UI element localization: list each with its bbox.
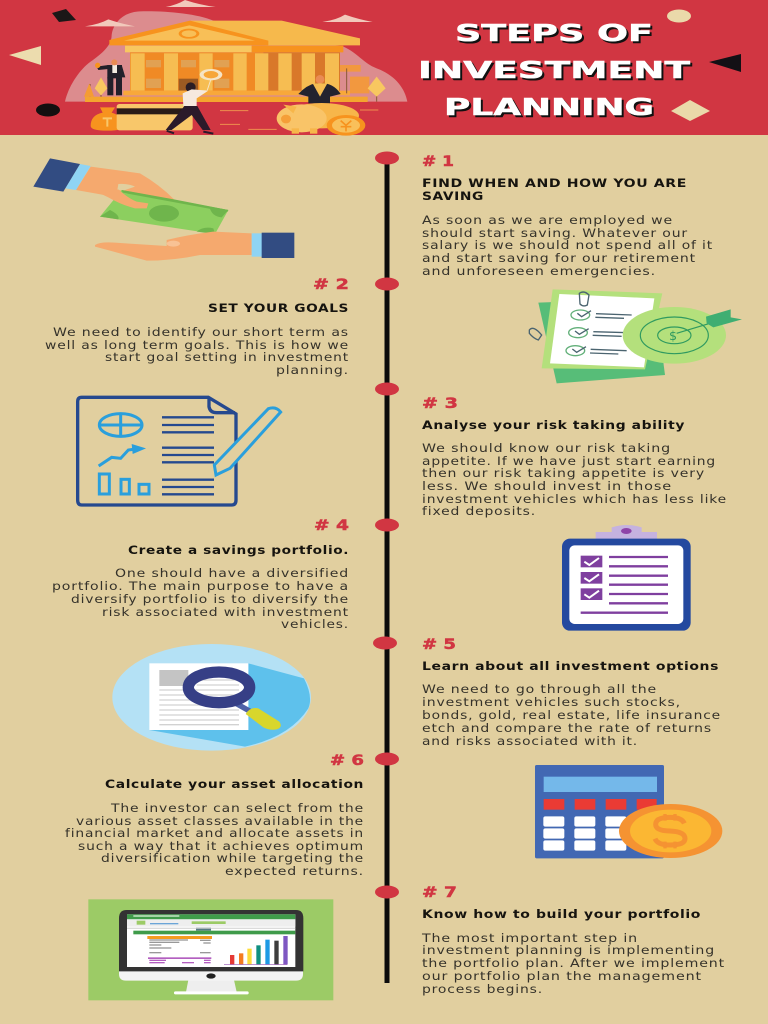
step 6 text: Calculate your asset allocation xyxy=(105,777,364,791)
step 3 text: fixed deposits. xyxy=(422,504,536,518)
icon: document with pen xyxy=(78,397,281,505)
step 7 text: investment planning is implementing xyxy=(422,943,715,957)
step 1 text: and unforeseen emergencies. xyxy=(422,264,656,278)
step 4 text: diversify portfolio is to diversify the xyxy=(71,592,349,606)
title: PLANNING xyxy=(444,95,654,121)
figure right xyxy=(298,83,341,103)
step 5 text: We need to go through all the xyxy=(422,682,657,696)
step 3 text: investment vehicles which has less like xyxy=(422,492,727,506)
title: STEPS OF xyxy=(457,23,655,49)
step 7 text: The most important step in xyxy=(421,931,638,945)
step 7 text: our portfolio plan the management xyxy=(422,969,702,983)
piggy bank xyxy=(284,103,359,128)
step 6 text: various asset classes available in the xyxy=(76,814,364,828)
icon: clipboard checklist xyxy=(562,525,691,631)
step 6 text: # 6 xyxy=(330,753,364,769)
icon: monitor with spreadsheet xyxy=(88,899,333,1000)
step 5 text: Learn about all investment options xyxy=(422,659,719,673)
step 1 text: and start saving for our retirement xyxy=(422,251,696,265)
step 4 text: vehicles. xyxy=(281,617,349,631)
icon: magnifying glass over document xyxy=(112,644,311,751)
step 3 text: then our risk taking appetite is very xyxy=(422,466,705,480)
step 1 text: As soon as we are employed we xyxy=(422,213,673,227)
step 2 text: start goal setting in investment xyxy=(105,350,349,364)
step 6 text: financial market and allocate assets in xyxy=(65,826,364,840)
step 1 text: # 1 xyxy=(422,154,454,170)
step 4 text xyxy=(52,518,349,631)
step 2 text: planning. xyxy=(276,363,349,377)
title: INVESTMENT xyxy=(420,60,693,86)
yen coin xyxy=(327,115,365,136)
step 6 text: The investor can select from the xyxy=(110,801,364,815)
step 6 text: expected returns. xyxy=(225,864,364,878)
trees xyxy=(90,80,101,97)
icon: hands exchanging money xyxy=(33,158,294,261)
title: PLANNING xyxy=(446,97,656,123)
decorative shapes xyxy=(9,9,741,121)
icon: goal checklist and target xyxy=(529,289,742,383)
step 1 text: FIND WHEN AND HOW YOU ARE xyxy=(422,176,687,190)
step 3 text xyxy=(422,396,727,518)
card xyxy=(117,104,193,130)
step 1 text: salary is we should not spend all of it xyxy=(422,238,713,252)
step 2 text: We need to identify our short term as xyxy=(53,325,349,339)
title xyxy=(418,21,693,123)
figure left xyxy=(97,65,125,95)
step 5 text xyxy=(422,637,721,748)
step 7 text: process begins. xyxy=(422,982,543,996)
step 5 text: investment vehicles such stocks, xyxy=(422,695,681,709)
icon: calculator and dollar coin xyxy=(535,765,722,858)
step 6 text: diversification while targeting the xyxy=(101,851,364,865)
timeline xyxy=(373,152,399,983)
step 2 text: well as long term goals. This is how we xyxy=(45,338,349,352)
step 4 text: risk associated with investment xyxy=(102,605,349,619)
step 6 text: such a way that it achieves optimum xyxy=(78,839,364,853)
step 3 text: Analyse your risk taking ability xyxy=(422,418,685,432)
title: STEPS OF xyxy=(455,21,653,47)
step 4 text: # 4 xyxy=(314,518,349,534)
step 2 text xyxy=(45,277,349,377)
step 6 text xyxy=(65,753,364,878)
step 5 text: # 5 xyxy=(422,637,456,653)
step 1 text xyxy=(422,154,713,278)
coin bag xyxy=(91,107,124,131)
step 2 text: # 2 xyxy=(313,277,349,293)
header illustration: bank with people xyxy=(65,0,407,136)
step 4 text: Create a savings portfolio. xyxy=(128,543,349,557)
step 3 text: We should know our risk taking xyxy=(422,441,671,455)
step 5 text: etch and compare the rate of returns xyxy=(422,721,712,735)
woman xyxy=(200,69,222,80)
step 7 text: the portfolio plan. After we implement xyxy=(422,956,725,970)
step 1 text: SAVING xyxy=(422,189,484,203)
step 7 text: Know how to build your portfolio xyxy=(422,907,701,921)
step 3 text: less. We should invest in those xyxy=(422,479,672,493)
step 5 text: bonds, gold, real estate, life insurance xyxy=(422,708,721,722)
icon: goal checklist and target: $ xyxy=(669,328,677,343)
step 4 text: portfolio. The main purpose to have a xyxy=(52,579,349,593)
step 3 text: appetite. If we have just start earning xyxy=(422,454,716,468)
step 7 text xyxy=(421,885,725,996)
step 2 text: SET YOUR GOALS xyxy=(208,301,349,315)
title: INVESTMENT xyxy=(418,58,691,84)
step 3 text: # 3 xyxy=(422,396,458,412)
step 4 text: One should have a diversified xyxy=(115,566,349,580)
step 7 text: # 7 xyxy=(422,885,457,901)
step 1 text: should start saving. Whatever our xyxy=(422,226,688,240)
header banner xyxy=(0,0,768,135)
step 5 text: and risks associated with it. xyxy=(422,734,638,748)
